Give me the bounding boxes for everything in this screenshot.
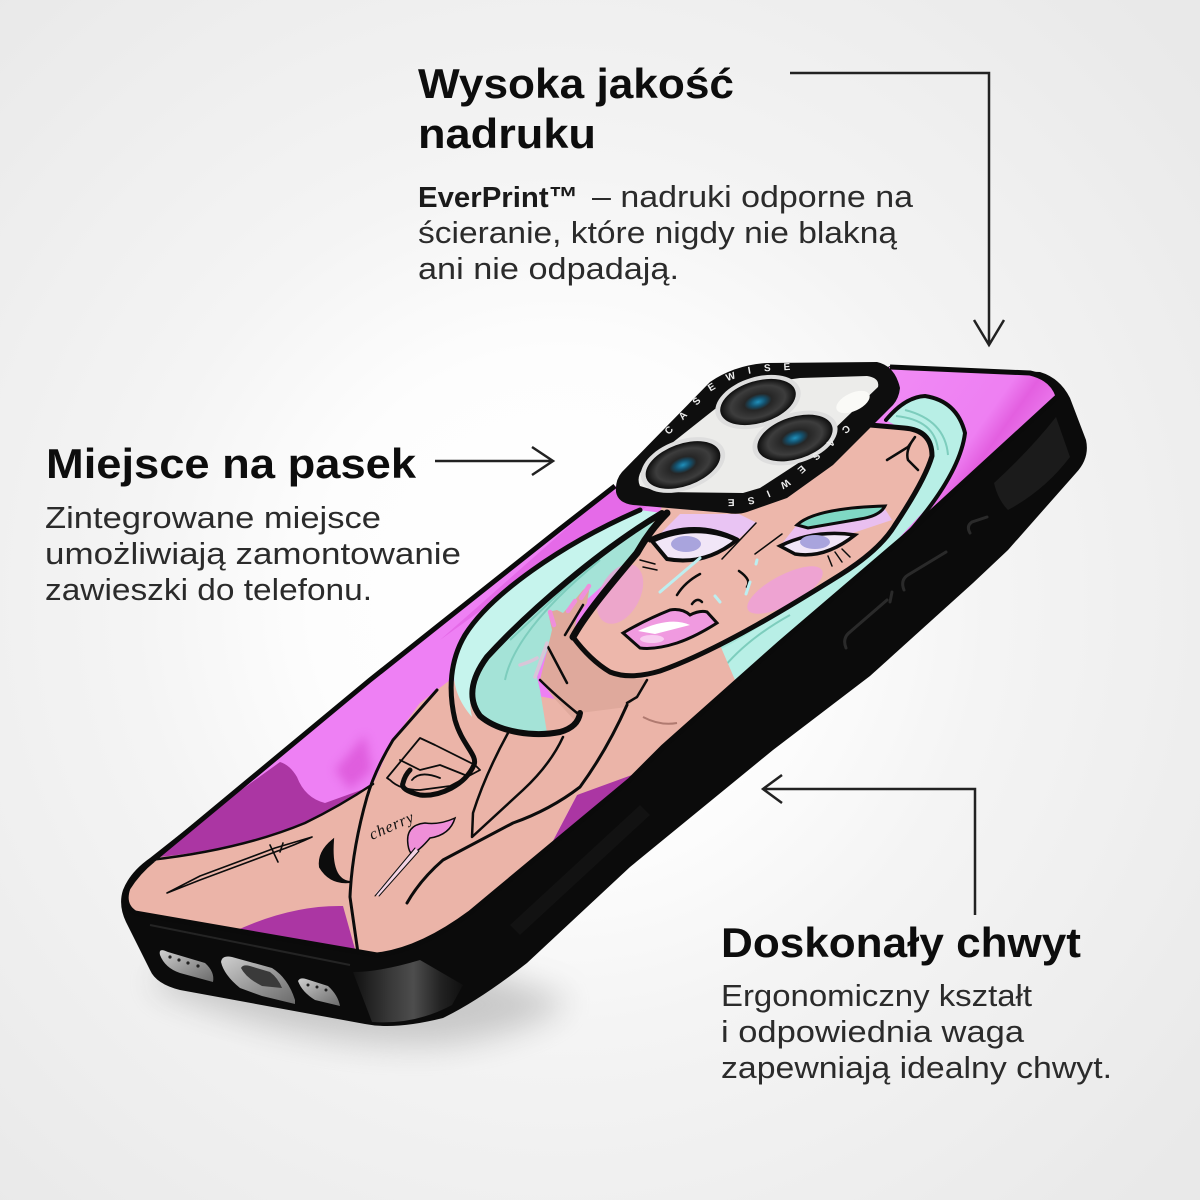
lens left: [633, 426, 733, 504]
right brow: [797, 506, 885, 528]
heading: [418, 60, 734, 157]
description: zapewniają idealny chwyt.: [721, 1050, 1112, 1085]
cherry script: cherry: [367, 809, 417, 844]
description: umożliwiają zamontowanie: [45, 536, 461, 571]
corner gloss: [353, 960, 463, 1022]
camera module: [616, 362, 900, 514]
nose: [677, 571, 748, 604]
callout: grip: [721, 919, 1112, 1085]
cheek blush: [747, 566, 823, 614]
bottom edge line: [150, 925, 350, 965]
description: EverPrint™: [418, 182, 578, 214]
neck skin: [693, 647, 735, 684]
side buttons: [845, 517, 987, 648]
pink backdrop: [240, 367, 890, 841]
description: i odpowiednia waga: [721, 1014, 1025, 1049]
left eyeshadow: [661, 514, 757, 538]
heading: Miejsce na pasek: [46, 440, 417, 487]
left eye: [640, 530, 737, 570]
heading: nadruku: [418, 110, 596, 157]
camera glass: [639, 376, 878, 493]
top right pink sweep: [889, 367, 1055, 508]
phone case body: [121, 366, 1087, 1026]
arrow: strap callout: [435, 447, 553, 475]
lens top: [709, 365, 807, 439]
nose lines: [722, 523, 782, 559]
description: ścieranie, które nigdy nie blakną: [418, 215, 898, 250]
speaker left: [160, 950, 213, 982]
right eye: [780, 533, 855, 566]
deeper pink near camera: [440, 490, 650, 640]
sword tattoo: [167, 837, 312, 893]
description: [418, 179, 914, 286]
speaker right: [298, 978, 340, 1006]
phone: [121, 362, 1087, 1026]
lens right: [745, 401, 845, 475]
right eye shadow: [782, 509, 892, 543]
lollipop tattoo: [375, 818, 455, 896]
body skin: [128, 672, 662, 952]
arrow: top callout: [790, 73, 1004, 345]
ring lettering bottom: CASEWISE: [728, 426, 850, 506]
callout: print quality: [418, 60, 914, 286]
lower purple: [240, 906, 355, 949]
left main hair: [475, 521, 654, 732]
heading: Wysoka jakość: [418, 60, 734, 107]
phone shadow: [150, 960, 570, 1045]
lower right purple: [553, 775, 632, 841]
description: ani nie odpadają.: [418, 251, 679, 286]
gun tattoo: [387, 738, 480, 790]
description: – nadruki odporne na: [592, 179, 914, 214]
callout: strap slot: [45, 440, 461, 607]
left pale hair strand: [454, 510, 662, 717]
description: Zintegrowane miejsce: [45, 500, 381, 535]
printed artwork: [128, 367, 1055, 952]
description: zawieszki do telefonu.: [45, 572, 372, 607]
arrow: grip callout: [763, 775, 975, 915]
top and side hair: [722, 398, 963, 680]
side sheen: [994, 417, 1070, 510]
hair and face outlines: [403, 396, 965, 795]
upper purple: [160, 762, 362, 857]
hair strands: [505, 410, 948, 680]
tears: [660, 558, 757, 602]
charging port: [221, 957, 295, 1004]
hand: [520, 585, 677, 724]
heading: Doskonały chwyt: [721, 919, 1081, 966]
description: [721, 978, 1112, 1085]
description: [45, 500, 461, 607]
body lines: [150, 690, 627, 953]
screen border: [126, 367, 1058, 955]
camera ring: [616, 362, 900, 514]
ring lettering top: CASEWISE: [665, 363, 790, 434]
lips: [623, 610, 717, 648]
right hair lower: [720, 536, 901, 649]
magenta accent: [335, 735, 372, 790]
left blush: [597, 564, 644, 624]
highlight: [833, 386, 873, 418]
description: Ergonomiczny kształt: [721, 978, 1032, 1013]
hip curve: [320, 840, 350, 882]
side texture: [510, 805, 650, 935]
face: [573, 425, 932, 676]
